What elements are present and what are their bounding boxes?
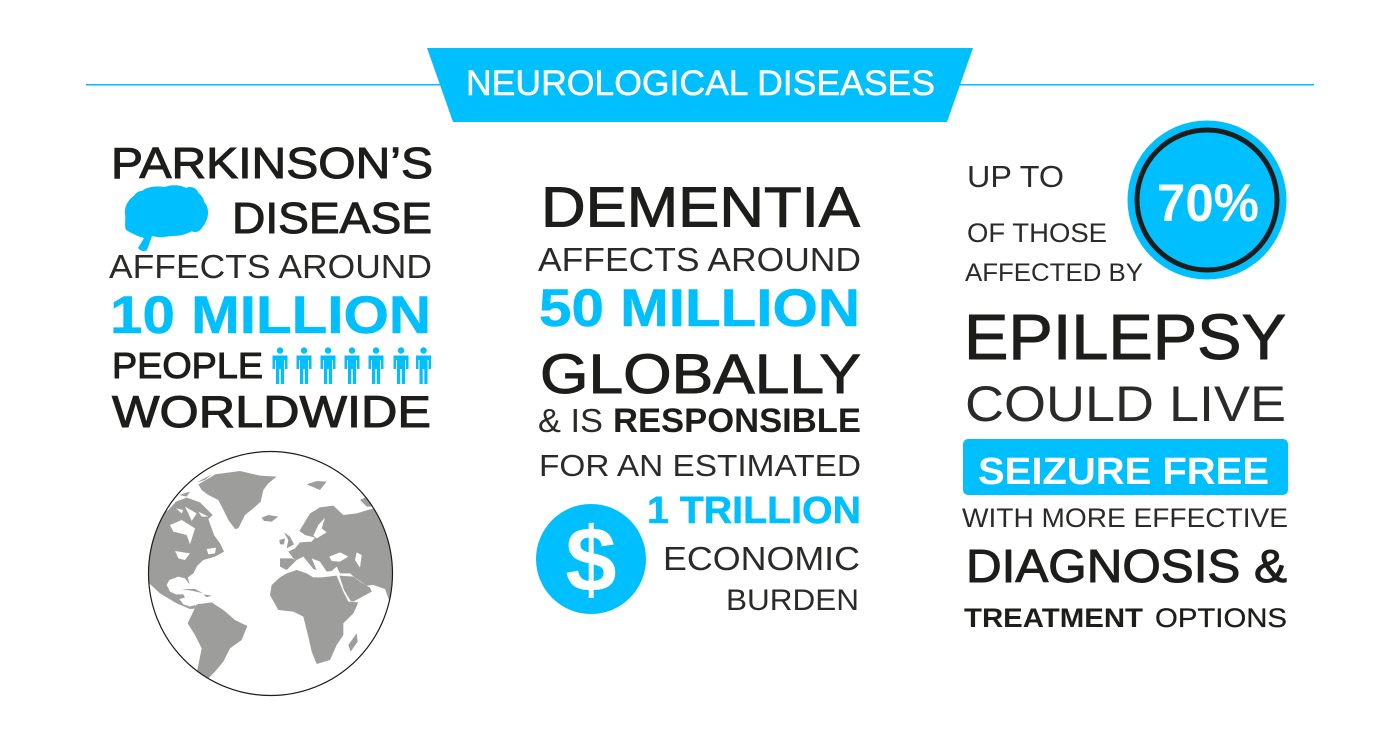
heading: disease: DISEASE bbox=[232, 195, 432, 243]
callout: seizure free bbox=[963, 439, 1288, 495]
text: burden: BURDEN bbox=[726, 584, 859, 617]
stat: 50 million: 50 MILLION bbox=[539, 279, 860, 338]
stat: 1 trillion: 1 TRILLION bbox=[647, 490, 861, 532]
greenland bbox=[198, 471, 277, 529]
text: treatment options: OPTIONS bbox=[1155, 603, 1287, 633]
stat: 10 million: 10 MILLION bbox=[110, 286, 431, 345]
text: and is responsible: RESPONSIBLE bbox=[613, 402, 861, 440]
title banner: NEUROLOGICAL DISEASES bbox=[466, 64, 935, 103]
heading: dementia: DEMENTIA bbox=[541, 176, 860, 240]
text: of those: OF THOSE bbox=[967, 218, 1107, 248]
header rule bbox=[86, 84, 1314, 86]
icon: brain bbox=[125, 185, 208, 251]
heading: globally: GLOBALLY bbox=[540, 342, 861, 405]
text: affects around: AFFECTS AROUND bbox=[109, 248, 432, 285]
panel: epilepsy bbox=[962, 120, 1288, 633]
text: economic: ECONOMIC bbox=[663, 541, 860, 578]
heading: diagnosis and: DIAGNOSIS & bbox=[966, 540, 1287, 592]
badge: 70 percent bbox=[1128, 120, 1286, 280]
text: affected by: AFFECTED BY bbox=[965, 259, 1143, 287]
heading: Parkinson's: PARKINSON’S bbox=[111, 140, 433, 188]
badge: 70 percent: 70% bbox=[1157, 174, 1259, 233]
heading: epilepsy: EPILEPSY bbox=[964, 301, 1286, 373]
title banner bbox=[427, 48, 973, 122]
text: treatment options bbox=[964, 603, 1287, 633]
text: treatment options: TREATMENT bbox=[964, 603, 1144, 633]
icon: globe bbox=[140, 452, 400, 696]
panel: Parkinson's disease bbox=[109, 140, 433, 696]
icon: dollar coin bbox=[536, 504, 646, 614]
text: affects around: AFFECTS AROUND bbox=[538, 241, 861, 278]
icon: dollar coin: $ bbox=[565, 509, 617, 611]
panel: dementia bbox=[536, 176, 861, 617]
text: and is responsible: & IS bbox=[538, 402, 603, 439]
text: up to: UP TO bbox=[967, 159, 1064, 194]
text: could live: COULD LIVE bbox=[965, 376, 1286, 432]
text: for an estimated: FOR AN ESTIMATED bbox=[539, 448, 861, 483]
icon: row of people bbox=[272, 347, 431, 384]
text: with more effective: WITH MORE EFFECTIVE bbox=[962, 503, 1288, 533]
text: people: PEOPLE bbox=[112, 345, 263, 386]
text: worldwide: WORLDWIDE bbox=[112, 388, 431, 437]
callout: seizure free: SEIZURE FREE bbox=[978, 451, 1269, 493]
